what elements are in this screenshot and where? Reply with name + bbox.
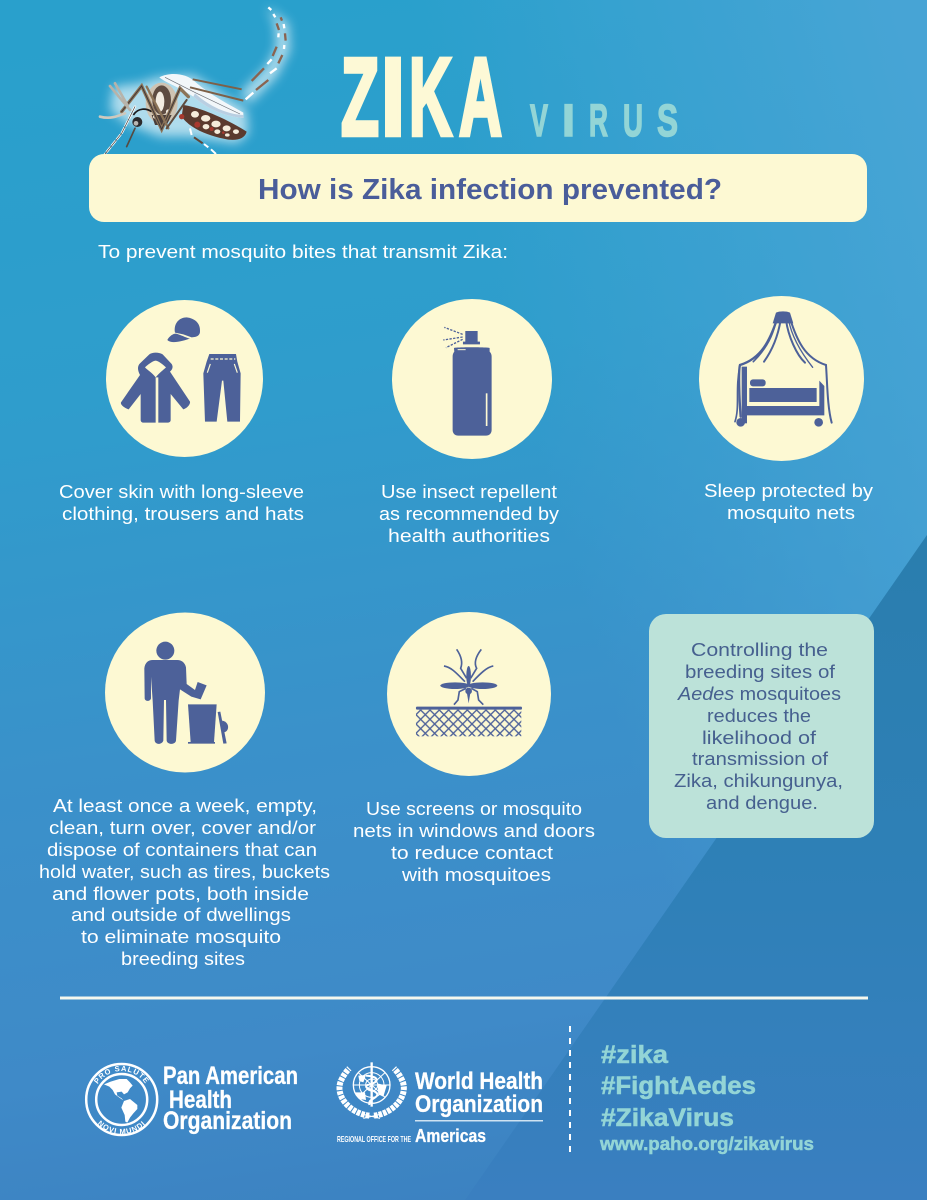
caption — [59, 482, 304, 524]
emblem: PAHO — [84, 1062, 158, 1136]
caption — [353, 799, 595, 885]
callout: breeding sites: and dengue. — [706, 793, 818, 813]
subtitle: VIRUS: S — [657, 95, 678, 146]
hashtags: www.paho.org/zikavirus — [599, 1133, 814, 1154]
caption: Use screens or mosquito — [366, 799, 582, 819]
icon: mosquito on net — [387, 612, 551, 776]
caption — [379, 482, 559, 546]
subtitle: VIRUS: U — [623, 95, 643, 146]
title: ZIKA: K — [409, 36, 452, 159]
emblem: PAHO: PRO SALUTE — [94, 1066, 150, 1084]
hind legs — [190, 7, 286, 154]
title: ZIKA: Z — [341, 36, 379, 159]
caption: health authorities — [388, 526, 550, 546]
hashtags: #ZikaVirus — [601, 1104, 734, 1132]
subtitle: VIRUS — [530, 95, 678, 146]
logo: World Health Organization: Americas — [415, 1125, 486, 1146]
caption: hold water, such as tires, buckets — [39, 862, 330, 882]
caption: breeding sites — [121, 949, 245, 969]
abdomen — [182, 105, 247, 140]
callout: breeding sites: breeding sites of — [685, 662, 836, 682]
caption: to eliminate mosquito — [81, 927, 281, 947]
title: ZIKA — [341, 36, 502, 159]
logo: Pan American Health Organization: Health — [169, 1086, 232, 1114]
caption: with mosquitoes — [401, 865, 551, 885]
caption: and outside of dwellings — [71, 905, 291, 925]
logo: Pan American Health Organization: Pan American — [163, 1062, 298, 1090]
subtitle: VIRUS: V — [530, 95, 548, 146]
panel: clothing — [59, 300, 304, 524]
callout: breeding sites: transmission of — [692, 749, 829, 769]
subtitle: VIRUS: I — [562, 95, 575, 146]
icon: spray can — [392, 299, 552, 459]
heading banner — [89, 154, 867, 222]
logo: World Health Organization: Organization — [415, 1091, 543, 1118]
hashtags — [599, 1041, 814, 1154]
callout: breeding sites: Zika, chikungunya, — [674, 771, 843, 791]
title: ZIKA: I — [381, 36, 405, 159]
callout: breeding sites: reduces the — [707, 706, 811, 726]
caption: clean, turn over, cover and/or — [49, 818, 316, 838]
caption: dispose of containers that can — [47, 840, 317, 860]
heading banner: How is Zika infection prevented? — [258, 174, 722, 206]
caption: mosquito nets — [727, 503, 855, 523]
caption: nets in windows and doors — [353, 821, 595, 841]
icon: bed with net — [699, 296, 864, 461]
front legs — [100, 83, 188, 154]
callout: breeding sites: likelihood of — [702, 728, 817, 748]
panel: bed net — [699, 296, 873, 523]
intro text: To prevent mosquito bites that transmit Zika: — [98, 242, 508, 262]
hashtags: #zika — [601, 1041, 669, 1069]
subtitle: VIRUS: R — [589, 95, 608, 146]
title: ZIKA: A — [459, 36, 502, 159]
hashtags: #FightAedes — [601, 1072, 756, 1100]
logo: World Health Organization — [337, 1062, 543, 1146]
icon: clothing — [106, 300, 263, 457]
callout: breeding sites: Aedes mosquitoes — [677, 684, 841, 704]
panel: screens — [353, 612, 595, 885]
callout: breeding sites — [649, 614, 874, 838]
caption: clothing, trousers and hats — [62, 504, 304, 524]
caption: At least once a week, empty, — [53, 796, 317, 816]
caption: Cover skin with long-sleeve — [59, 482, 304, 502]
emblem: WHO — [339, 1062, 404, 1118]
logo: World Health Organization: World Health — [415, 1068, 543, 1095]
callout: breeding sites: Controlling the — [691, 640, 828, 660]
emblem: PAHO: NOVI MUNDI — [98, 1120, 145, 1134]
caption: Sleep protected by — [704, 481, 873, 501]
caption: to reduce contact — [391, 843, 553, 863]
logo: World Health Organization: REGIONAL OFFICE FOR THE — [337, 1134, 411, 1144]
caption — [704, 481, 873, 523]
wings — [159, 74, 243, 118]
caption: and flower pots, both inside — [52, 884, 309, 904]
logo: Pan American Health Organization: Organization — [163, 1107, 292, 1135]
caption: Use insect repellent — [381, 482, 557, 502]
icon: person with bin — [105, 612, 265, 772]
thorax and head — [146, 83, 178, 124]
caption: as recommended by — [379, 504, 559, 524]
panel: repellent — [379, 299, 559, 546]
caption — [39, 796, 330, 969]
panel: containers — [39, 612, 330, 969]
logo: Pan American Health Organization — [84, 1062, 298, 1136]
illustration: mosquito — [100, 7, 290, 154]
